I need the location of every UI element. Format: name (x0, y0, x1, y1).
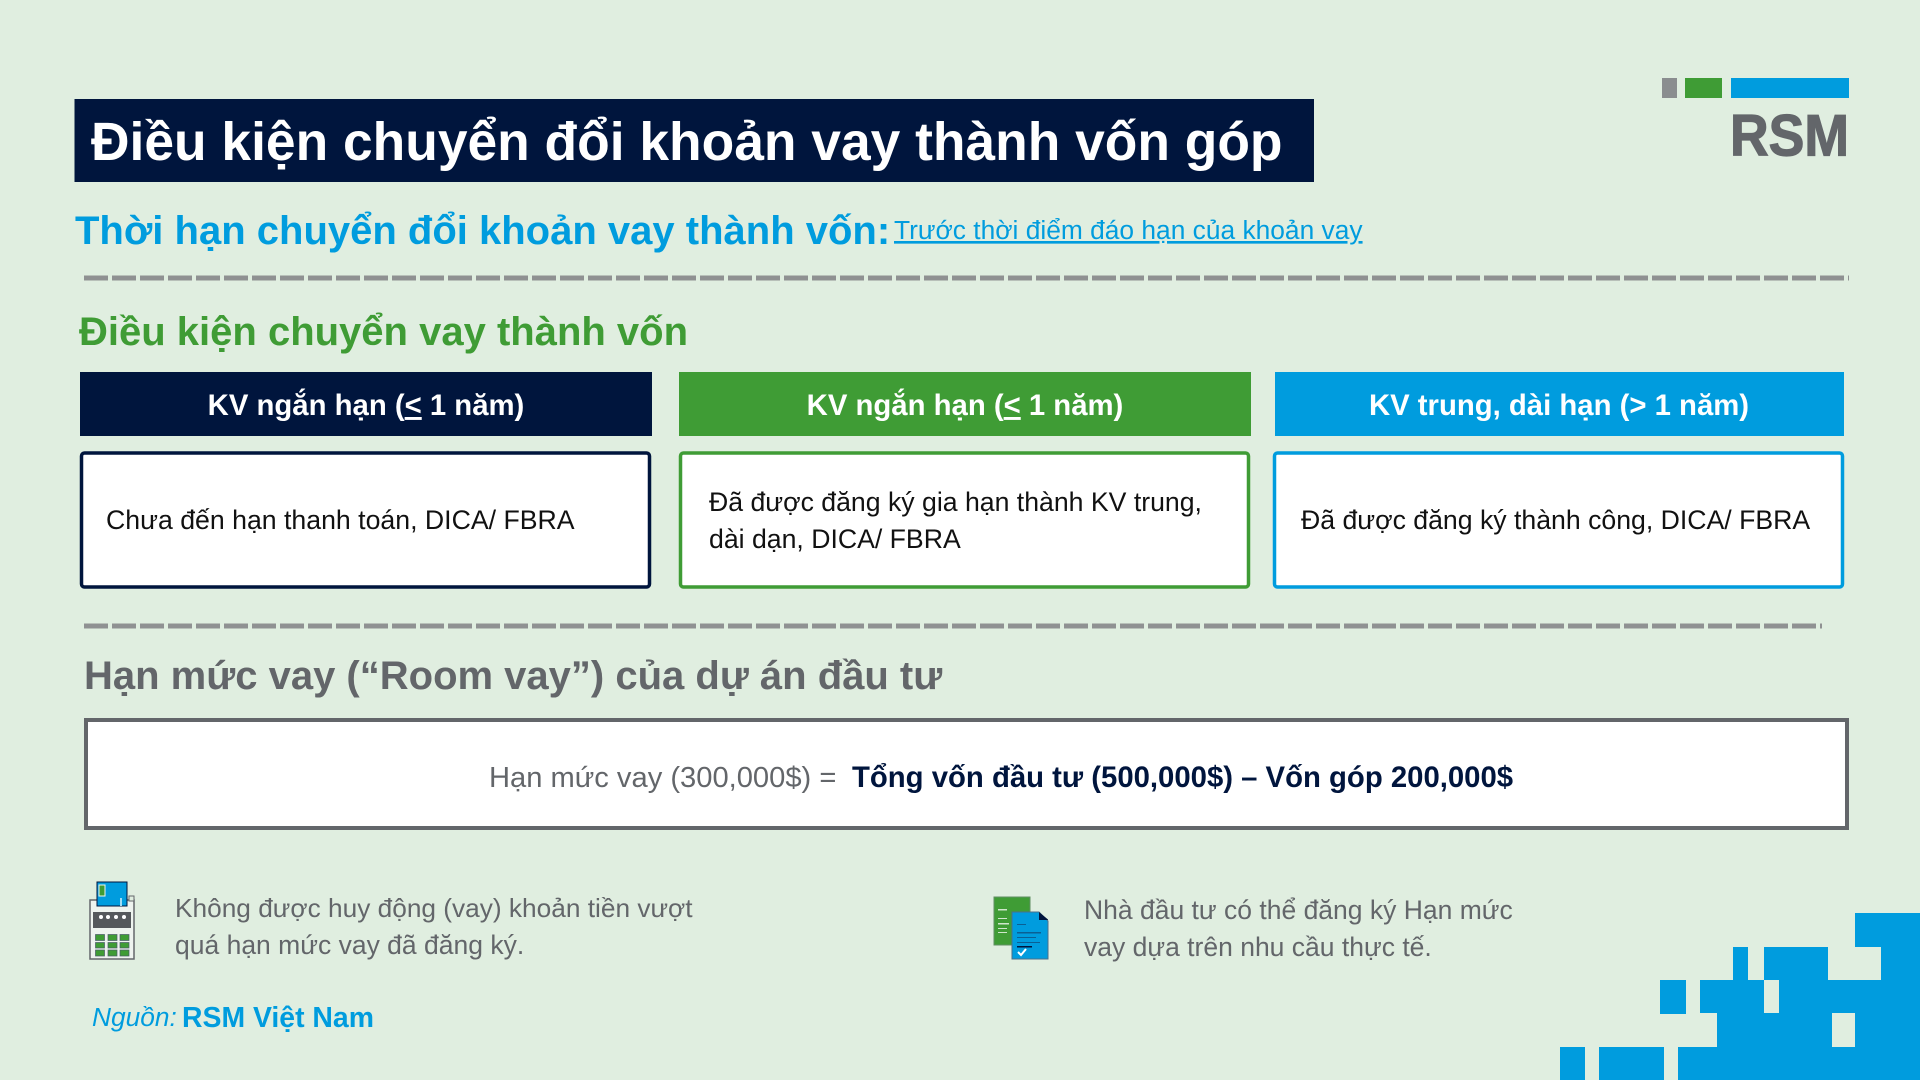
condition box green (680, 453, 1248, 587)
condition box blue: Đã được đăng ký thành công, DICA/ FBRA (1301, 505, 1810, 535)
source: RSM Việt Nam (182, 1002, 374, 1034)
formula box: Hạn mức vay (300,000$) = (489, 762, 836, 794)
note: loan limit (175, 893, 693, 960)
icon: documents (994, 897, 1048, 959)
note: loan limit: quá hạn mức vay đã đăng ký. (175, 930, 524, 960)
column header blue (1275, 372, 1844, 436)
logo: RSM: RSM (1730, 104, 1849, 168)
logo: RSM (1662, 78, 1849, 168)
title banner: Điều kiện chuyển đổi khoản vay thành vốn góp (91, 113, 1283, 172)
column header blue: KV trung, dài hạn (> 1 năm) (1369, 389, 1749, 422)
condition box navy (82, 453, 650, 587)
note: loan limit: Không được huy động (vay) khoản tiền vượt (175, 893, 693, 923)
source: Nguồn: (92, 1002, 177, 1032)
icon: calculator with card (90, 882, 134, 959)
title banner (74, 99, 1314, 182)
panel: short-term loan extended (679, 372, 1251, 587)
column header navy: KV ngắn hạn (< 1 năm) (208, 388, 524, 422)
column header green (679, 372, 1251, 436)
conversion deadline line: Trước thời điểm đáo hạn của khoản vay (894, 215, 1363, 245)
formula box: Tổng vốn đầu tư (500,000$) – Vốn góp 200,000$ (852, 761, 1513, 794)
column header navy (80, 372, 652, 436)
source (92, 1002, 374, 1034)
conversion deadline line: Thời hạn chuyển đổi khoản vay thành vốn: (75, 209, 890, 253)
panel: short-term loan not yet due (80, 372, 652, 587)
decorative pixel skyline (1560, 913, 1920, 1080)
column header green: KV ngắn hạn (< 1 năm) (807, 388, 1123, 422)
note: investor registration: Nhà đầu tư có thể đăng ký Hạn mức (1084, 895, 1513, 925)
formula box (86, 720, 1847, 828)
heading: loan room: Hạn mức vay (“Room vay”) của dự án đầu tư (84, 654, 942, 698)
panel: medium and long-term loan (1274, 372, 1844, 587)
condition box blue (1274, 453, 1842, 587)
heading: conversion conditions: Điều kiện chuyển vay thành vốn (79, 310, 688, 354)
condition box green: Đã được đăng ký gia hạn thành KV trung, (709, 487, 1202, 517)
condition box green: dài dạn, DICA/ FBRA (709, 524, 961, 554)
condition box navy: Chưa đến hạn thanh toán, DICA/ FBRA (106, 505, 575, 535)
note: investor registration: vay dựa trên nhu cầu thực tế. (1084, 932, 1432, 962)
conversion deadline line (75, 209, 1363, 253)
note: investor registration (1084, 895, 1513, 962)
